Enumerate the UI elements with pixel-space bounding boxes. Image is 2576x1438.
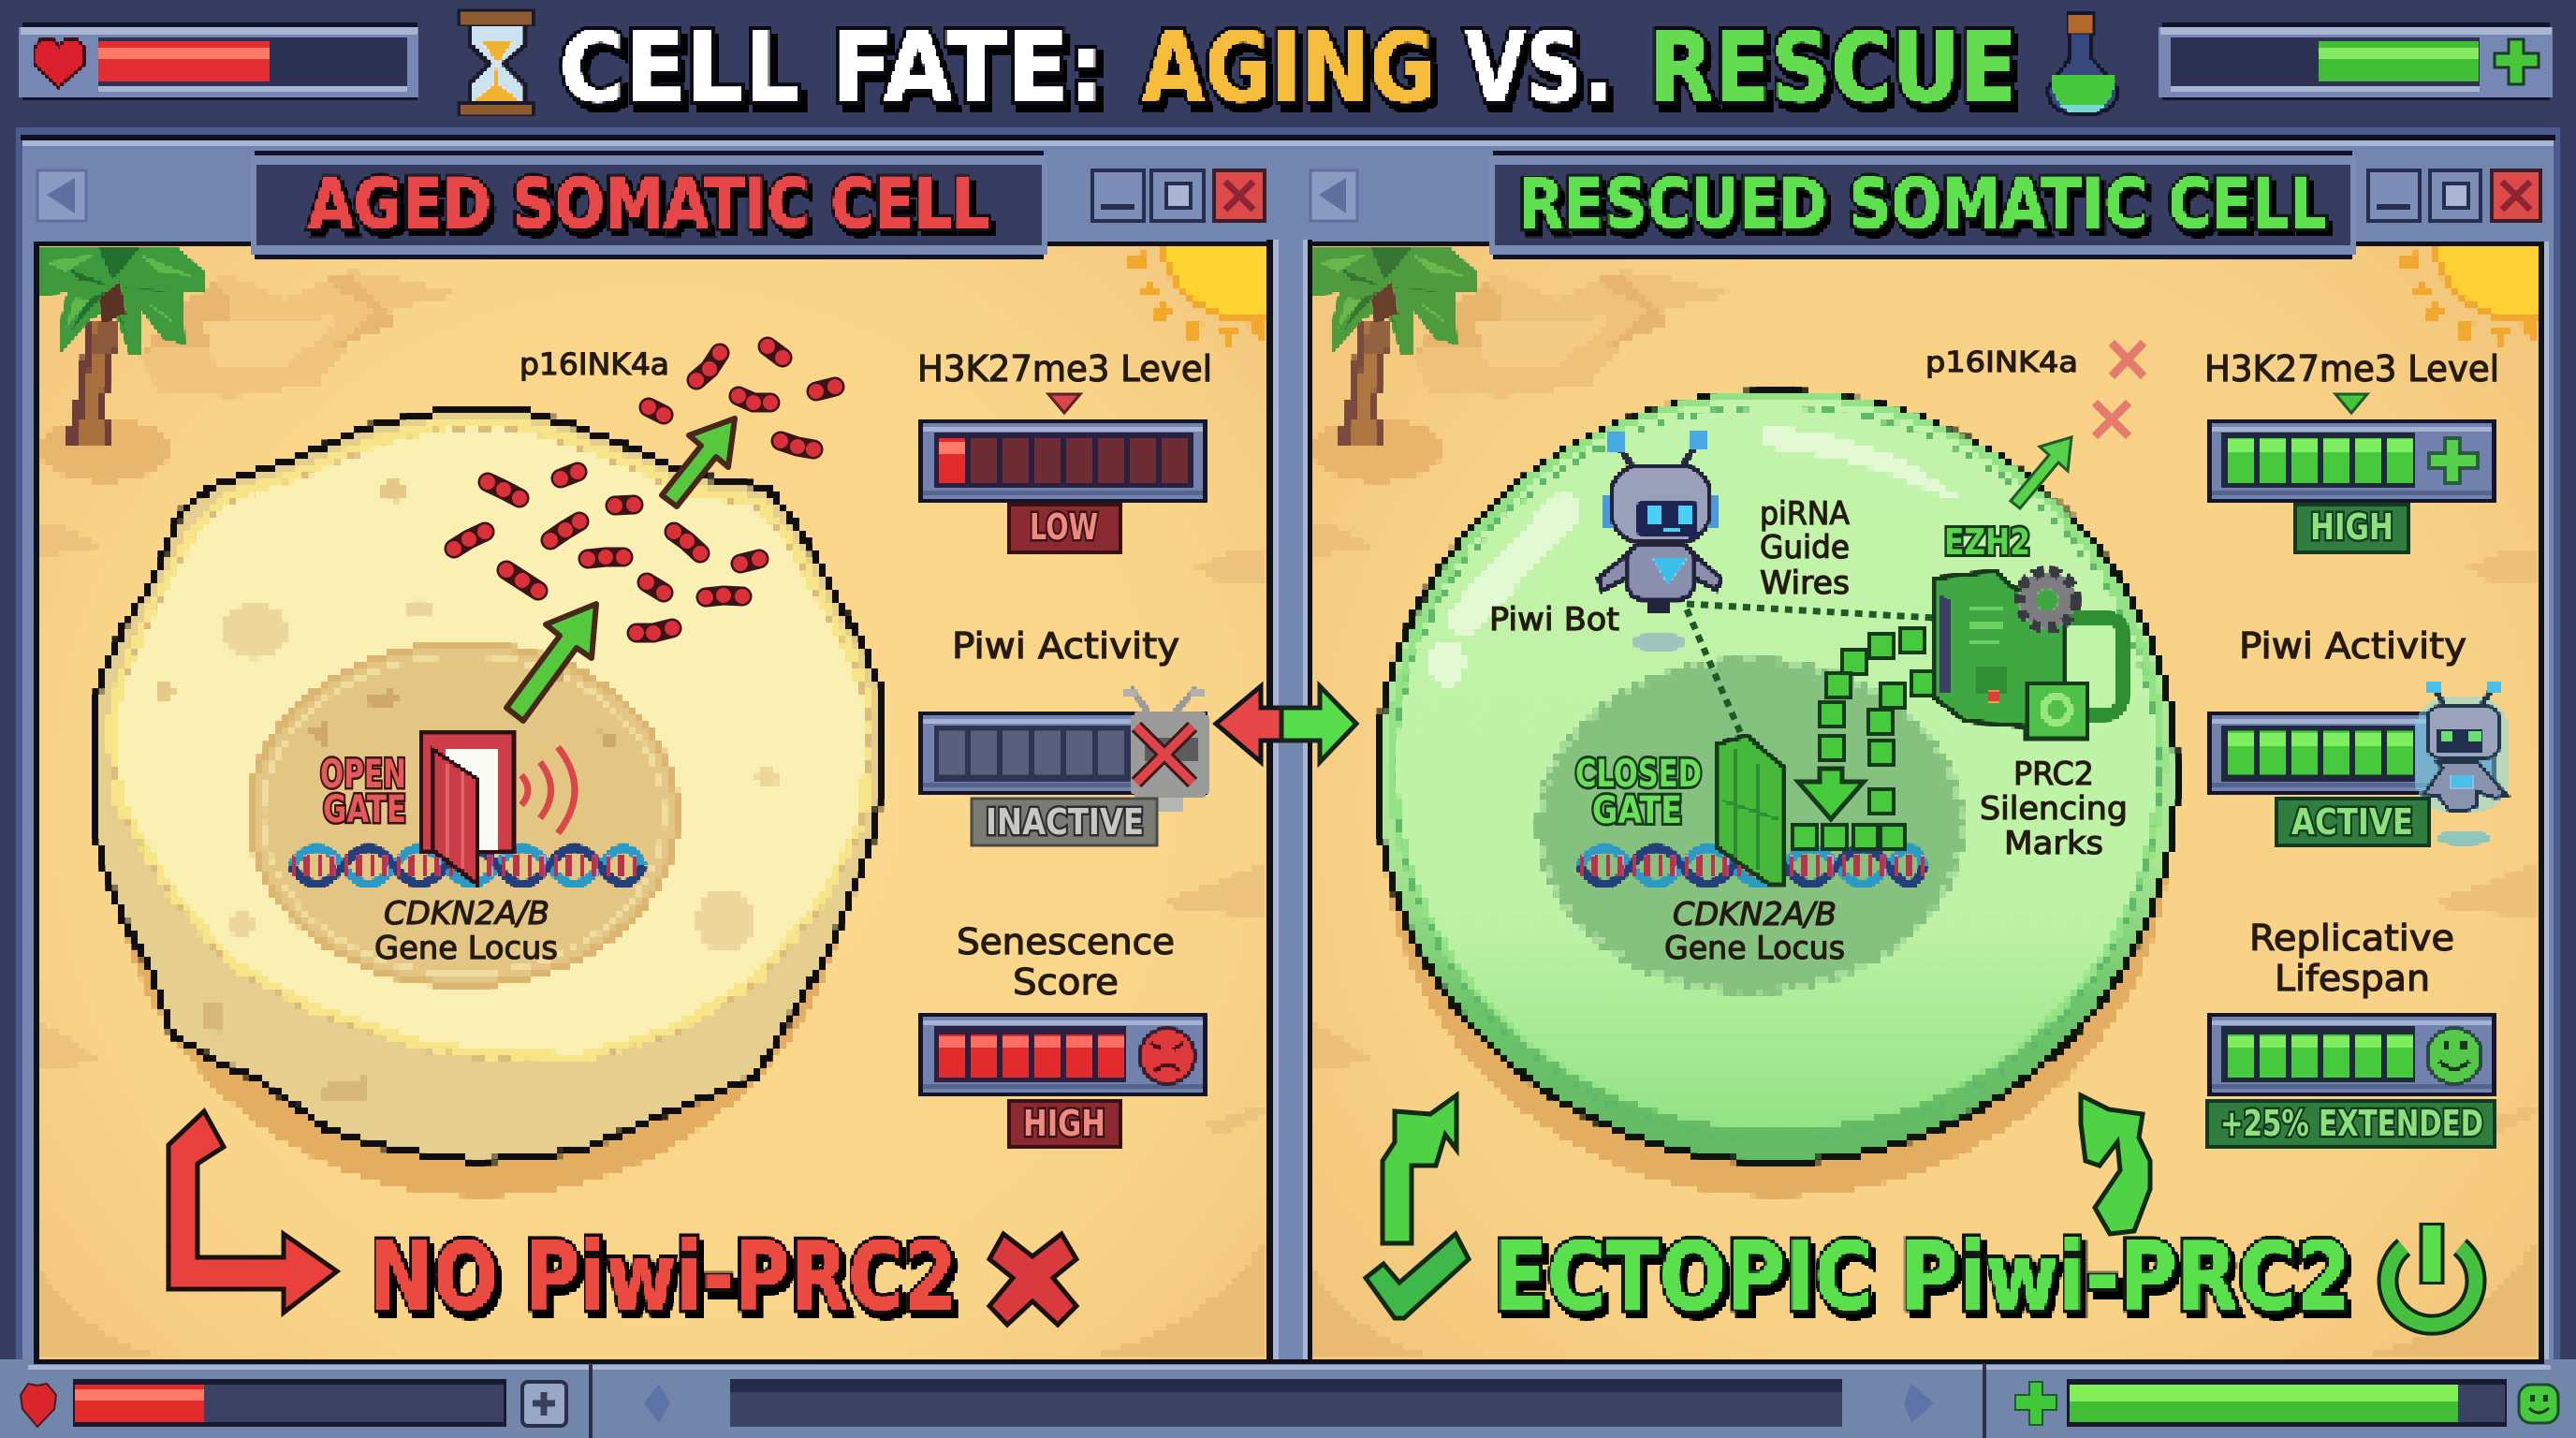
- meter: replicative lifespan: Replicative: [2249, 917, 2454, 959]
- left window buttons: [37, 170, 1265, 221]
- piRNA guide wires: [1687, 604, 1935, 732]
- icon: sad face: [1140, 1029, 1194, 1083]
- DNA helix: [291, 848, 643, 884]
- p16INK4a protein chains: [454, 346, 835, 633]
- icon: plus: [2429, 438, 2478, 483]
- arrow: centre double arrow: [1216, 686, 1356, 762]
- meter: Piwi activity inactive: INACTIVE: [986, 801, 1144, 843]
- icon: scroll left arrow: [644, 1384, 670, 1423]
- icon: plus: [2495, 39, 2539, 84]
- heading: aged somatic cell: AGED SOMATIC CELL: [308, 165, 989, 244]
- meter: H3K27me3 low: [917, 348, 1212, 552]
- icon: disabled robot: [1123, 688, 1209, 811]
- meter: H3K27me3 high: [2204, 348, 2499, 552]
- label: p16INK4a: p16INK4a: [520, 346, 669, 382]
- panel: right meters: [2204, 348, 2509, 1147]
- label: EZH2: EZH2: [1944, 521, 2030, 563]
- meter: replicative lifespan: [2207, 917, 2496, 1147]
- label: piRNA guide wires: Guide: [1760, 529, 1850, 566]
- label: PRC2 silencing marks: Silencing: [1980, 790, 2128, 828]
- icon: green plus: [2015, 1382, 2056, 1425]
- icon: heart: [35, 39, 84, 87]
- window divider: [34, 240, 2549, 1363]
- arrow: protein export from cell: [662, 418, 735, 506]
- panel: right title plaque: [1489, 151, 2356, 259]
- cell body: [1377, 391, 2176, 1162]
- arrow: marks down to gene: [1798, 769, 1864, 819]
- left status bar: [73, 1379, 506, 1427]
- icon: check mark: [1366, 1234, 1469, 1318]
- label: gene locus: CDKN2A/B: [384, 895, 549, 932]
- label: open gate: GATE: [323, 788, 406, 831]
- meter: H3K27me3 high: HIGH: [2310, 506, 2393, 548]
- icon: power symbol: [2388, 1223, 2476, 1325]
- label: p16INK4a silenced: p16INK4a: [1925, 346, 2078, 379]
- panel: left title plaque: [251, 151, 1047, 259]
- meter: Piwi activity active: ACTIVE: [2291, 801, 2413, 843]
- meter: Piwi activity active: Piwi Activity: [2239, 625, 2466, 667]
- title: AGING: [1142, 12, 1436, 125]
- meter: Piwi activity active: [2207, 625, 2509, 845]
- arrow: green curved arrow right: [2081, 1095, 2150, 1234]
- meter: replicative lifespan: +25% EXTENDED: [2220, 1103, 2483, 1144]
- icon: happy face: [2427, 1029, 2481, 1083]
- panel: left desert background: [37, 147, 1332, 1359]
- arrow: protein export from nucleus: [506, 604, 596, 721]
- icon: Piwi bot: [1599, 431, 1720, 652]
- top-left health bar: [19, 22, 418, 100]
- icon: open door: [421, 733, 513, 884]
- right call-out: ectopic Piwi-PRC2: [1366, 1095, 2476, 1331]
- text: NO Piwi-PRC2: NO Piwi-PRC2: [370, 1222, 957, 1331]
- text: ECTOPIC Piwi-PRC2: ECTOPIC Piwi-PRC2: [1493, 1222, 2351, 1331]
- label: closed gate: GATE: [1592, 789, 1682, 832]
- scroll track: [730, 1379, 1842, 1427]
- label: gene locus: [374, 895, 558, 967]
- top-right energy bar: [2159, 22, 2553, 100]
- panel: right desert background: [1310, 147, 2576, 1359]
- arrow: red L arrow: [168, 1111, 337, 1313]
- icon: heart small: [21, 1384, 56, 1427]
- icon: smiley small: [2519, 1385, 2558, 1423]
- label: closed gate: CLOSED: [1575, 753, 1702, 796]
- title: [559, 12, 2017, 125]
- label: gene locus: CDKN2A/B: [1673, 896, 1837, 933]
- title: CELL FATE:: [559, 12, 1105, 125]
- label: gene locus: Gene Locus: [374, 930, 558, 967]
- meter: H3K27me3 low: H3K27me3 Level: [917, 348, 1212, 389]
- DNA helix: [1579, 848, 1924, 884]
- cell ground shadow: [112, 489, 852, 1196]
- icon: sound waves: [521, 747, 575, 833]
- meter: H3K27me3 high: H3K27me3 Level: [2204, 348, 2499, 389]
- label: open gate: OPEN: [320, 751, 406, 797]
- cell ground shadow: [1383, 470, 2170, 1196]
- icon: closed door: [1718, 736, 1783, 884]
- panel: aged cell illustration: [94, 346, 882, 1196]
- meter: senescence score high: Score: [1013, 961, 1119, 1003]
- icon: potion flask: [2048, 13, 2117, 114]
- bottom status bar: [0, 1359, 2576, 1438]
- nucleus: [250, 644, 677, 985]
- icon: faded X marks: [2095, 343, 2144, 436]
- right window buttons: [1310, 170, 2540, 221]
- label: gene locus: Gene Locus: [1664, 930, 1845, 967]
- arrow: green up arrow left: [1383, 1095, 1456, 1243]
- icon: scroll right arrow: [1904, 1384, 1934, 1423]
- cell body: [94, 409, 882, 1161]
- title: VS.: [1465, 12, 1613, 125]
- arrow: blocked export: [2011, 437, 2071, 508]
- title: RESCUE: [1649, 12, 2017, 125]
- panel: left meters: [917, 348, 1212, 1147]
- left call-out: no Piwi-PRC2: [168, 1111, 1076, 1331]
- icon: red X: [989, 1234, 1076, 1325]
- meter: Piwi activity inactive: Piwi Activity: [952, 625, 1179, 667]
- label: closed gate: [1575, 753, 1702, 832]
- meter: senescence score high: HIGH: [1023, 1103, 1105, 1144]
- label: piRNA guide wires: Wires: [1760, 565, 1850, 602]
- icon: plus button: [522, 1382, 566, 1426]
- right status bar: [2067, 1379, 2507, 1427]
- label: open gate: [320, 751, 406, 831]
- meter: Piwi activity inactive: [918, 625, 1209, 845]
- nucleus: [1536, 657, 1965, 994]
- label: PRC2 silencing marks: PRC2: [2013, 756, 2094, 793]
- panel: rescued cell illustration: [1377, 343, 2176, 1196]
- meter: senescence score high: Senescence: [957, 921, 1175, 962]
- meter: senescence score high: [918, 921, 1208, 1147]
- meter: H3K27me3 low: LOW: [1030, 506, 1098, 548]
- label: PRC2 silencing marks: Marks: [2004, 825, 2103, 862]
- label: piRNA guide wires: piRNA: [1760, 495, 1850, 533]
- meter: replicative lifespan: Lifespan: [2275, 958, 2430, 999]
- icon: EZH2 machine: [1935, 571, 2123, 738]
- label: PRC2 silencing marks: [1980, 756, 2128, 862]
- label: gene locus: [1664, 896, 1845, 967]
- heading: rescued somatic cell: RESCUED SOMATIC CELL: [1518, 165, 2327, 244]
- label: Piwi Bot: Piwi Bot: [1489, 601, 1619, 638]
- icon: hourglass: [460, 11, 534, 115]
- icon: active robot: [2415, 682, 2509, 845]
- label: piRNA guide wires: [1760, 495, 1850, 602]
- PRC2 silencing marks: [1793, 628, 1936, 849]
